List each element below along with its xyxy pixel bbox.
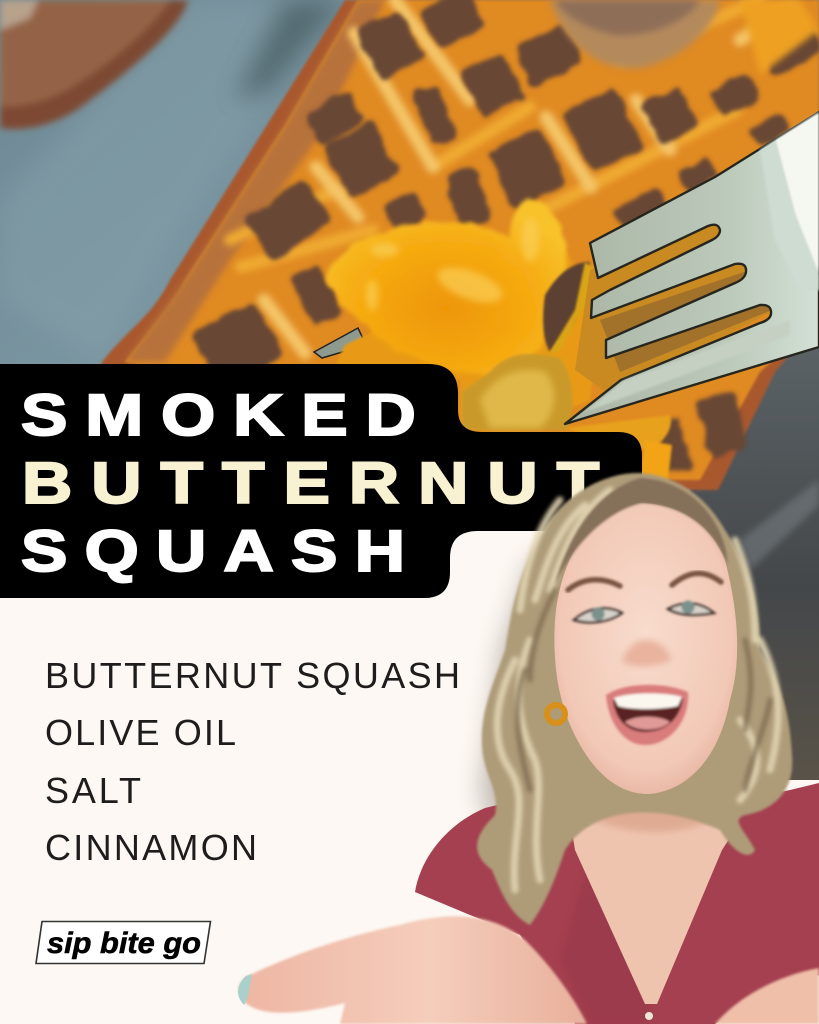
- eyes: [574, 600, 714, 622]
- heading line 3: SQUASH: [21, 518, 405, 584]
- cream lower panel: [0, 526, 819, 1024]
- ingredient: olive oil: OLIVE OIL: [45, 712, 236, 753]
- hair part over forehead: [555, 478, 728, 585]
- earring: [547, 705, 565, 723]
- logo: sip bite go: [36, 922, 210, 964]
- right wrist: [715, 968, 819, 1024]
- nose: [622, 640, 672, 666]
- lower fork tine behind the bite: [314, 328, 366, 358]
- red shirt: [415, 783, 819, 1024]
- eyebrows: [568, 573, 721, 590]
- neck and chest: [570, 760, 735, 1004]
- back hair: [477, 473, 792, 925]
- outstretched hand: [239, 916, 587, 1024]
- hair lowlights: [517, 590, 770, 790]
- squash bite on the fork: [314, 198, 775, 480]
- bright fork highlight: [775, 112, 819, 275]
- ingredient: cinnamon: CINNAMON: [45, 827, 257, 868]
- fork: [565, 112, 819, 424]
- fingernail: [238, 974, 252, 1005]
- squash skin: [100, 0, 819, 490]
- fork body and tines: [565, 112, 819, 424]
- main orange bite: [326, 198, 566, 375]
- woman portrait: [238, 473, 819, 1024]
- squash flesh: [125, 0, 819, 480]
- title banner: [0, 364, 642, 598]
- ingredient: butternut squash: BUTTERNUT SQUASH: [45, 655, 460, 696]
- background: parchment paper: [0, 0, 819, 790]
- shirt button: [645, 1012, 653, 1020]
- squash seen between the tines: [575, 222, 775, 395]
- rim shading on flesh: [125, 0, 385, 362]
- bite texture: [366, 218, 539, 311]
- mouth: [606, 685, 688, 745]
- logo: sip bite go: sip bite go: [47, 927, 201, 960]
- hair highlights: [497, 490, 778, 890]
- ingredients list: [45, 655, 460, 868]
- banner shape: [0, 364, 642, 598]
- face: [554, 503, 737, 794]
- bright scored lines: [230, 0, 819, 353]
- ingredient: salt: SALT: [45, 770, 141, 811]
- charred grid patches: [191, 0, 819, 474]
- heading line 2: BUTTERNUT: [22, 450, 599, 516]
- blurred roasted squash at top left: [0, 0, 188, 129]
- charred skin piece on bite: [543, 262, 590, 352]
- main squash half with scored grid: [100, 0, 819, 490]
- heading line 1: SMOKED: [21, 382, 416, 448]
- soft shadow around hair: [480, 560, 560, 860]
- fork lower shine: [585, 320, 790, 412]
- blurred squash at top: [550, 0, 720, 68]
- yellow squash strands: [462, 354, 573, 430]
